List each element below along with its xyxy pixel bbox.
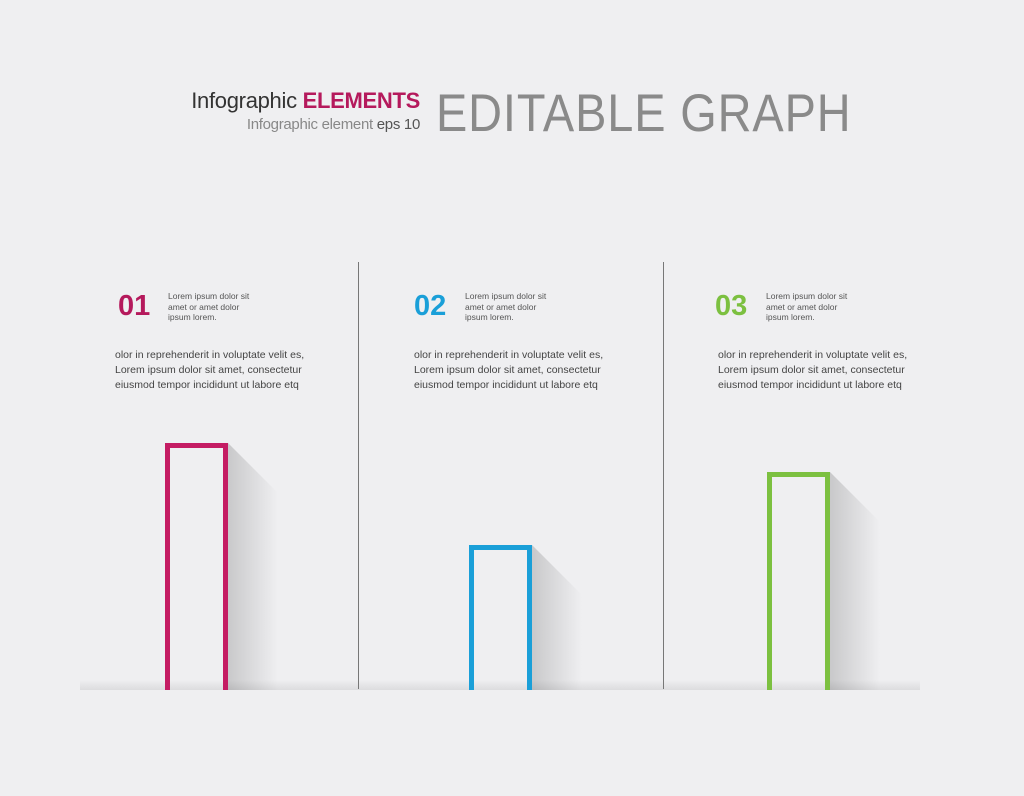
body text (718, 349, 907, 391)
bar 03 (767, 472, 830, 690)
short text: Lorem ipsum dolor sit (465, 291, 546, 301)
short text: amet or amet dolor (766, 302, 837, 312)
body text: Lorem ipsum dolor sit amet, consectetur (115, 364, 302, 376)
panel: 02 (414, 290, 603, 690)
panel: 03 (715, 290, 907, 690)
body text: Lorem ipsum dolor sit amet, consectetur (414, 364, 601, 376)
short text: Lorem ipsum dolor sit (168, 291, 249, 301)
short text: ipsum lorem. (465, 312, 514, 322)
divider 2 (663, 262, 664, 689)
short text: Lorem ipsum dolor sit (766, 291, 847, 301)
divider 1 (358, 262, 359, 689)
body text: eiusmod tempor incididunt ut labore etq (718, 379, 902, 391)
bar 02 (469, 545, 532, 690)
title: EDITABLE GRAPH (436, 84, 852, 143)
body text: eiusmod tempor incididunt ut labore etq (414, 379, 598, 391)
number 03: 03 (715, 290, 747, 322)
body text: olor in reprehenderit in voluptate velit es, (115, 349, 304, 361)
short text: ipsum lorem. (168, 312, 217, 322)
short text: amet or amet dolor (465, 302, 536, 312)
header: subtitle block (191, 88, 420, 133)
subheading: Infographic element eps 10 (247, 116, 420, 133)
body text: eiusmod tempor incididunt ut labore etq (115, 379, 299, 391)
number 02: 02 (414, 290, 446, 322)
body text: olor in reprehenderit in voluptate velit es, (414, 349, 603, 361)
short text: amet or amet dolor (168, 302, 239, 312)
body text: Lorem ipsum dolor sit amet, consectetur (718, 364, 905, 376)
short text (766, 291, 848, 322)
heading: infographic elements: Infographic ELEMENTS (191, 88, 420, 113)
short text (168, 291, 250, 322)
body text (115, 349, 304, 391)
baseline shadow (80, 680, 920, 690)
short text (465, 291, 546, 322)
bar 01 (165, 443, 228, 690)
body text: olor in reprehenderit in voluptate velit es, (718, 349, 907, 361)
panel: 01 (115, 290, 304, 690)
body text (414, 349, 603, 391)
short text: ipsum lorem. (766, 312, 815, 322)
number 01: 01 (118, 290, 150, 322)
